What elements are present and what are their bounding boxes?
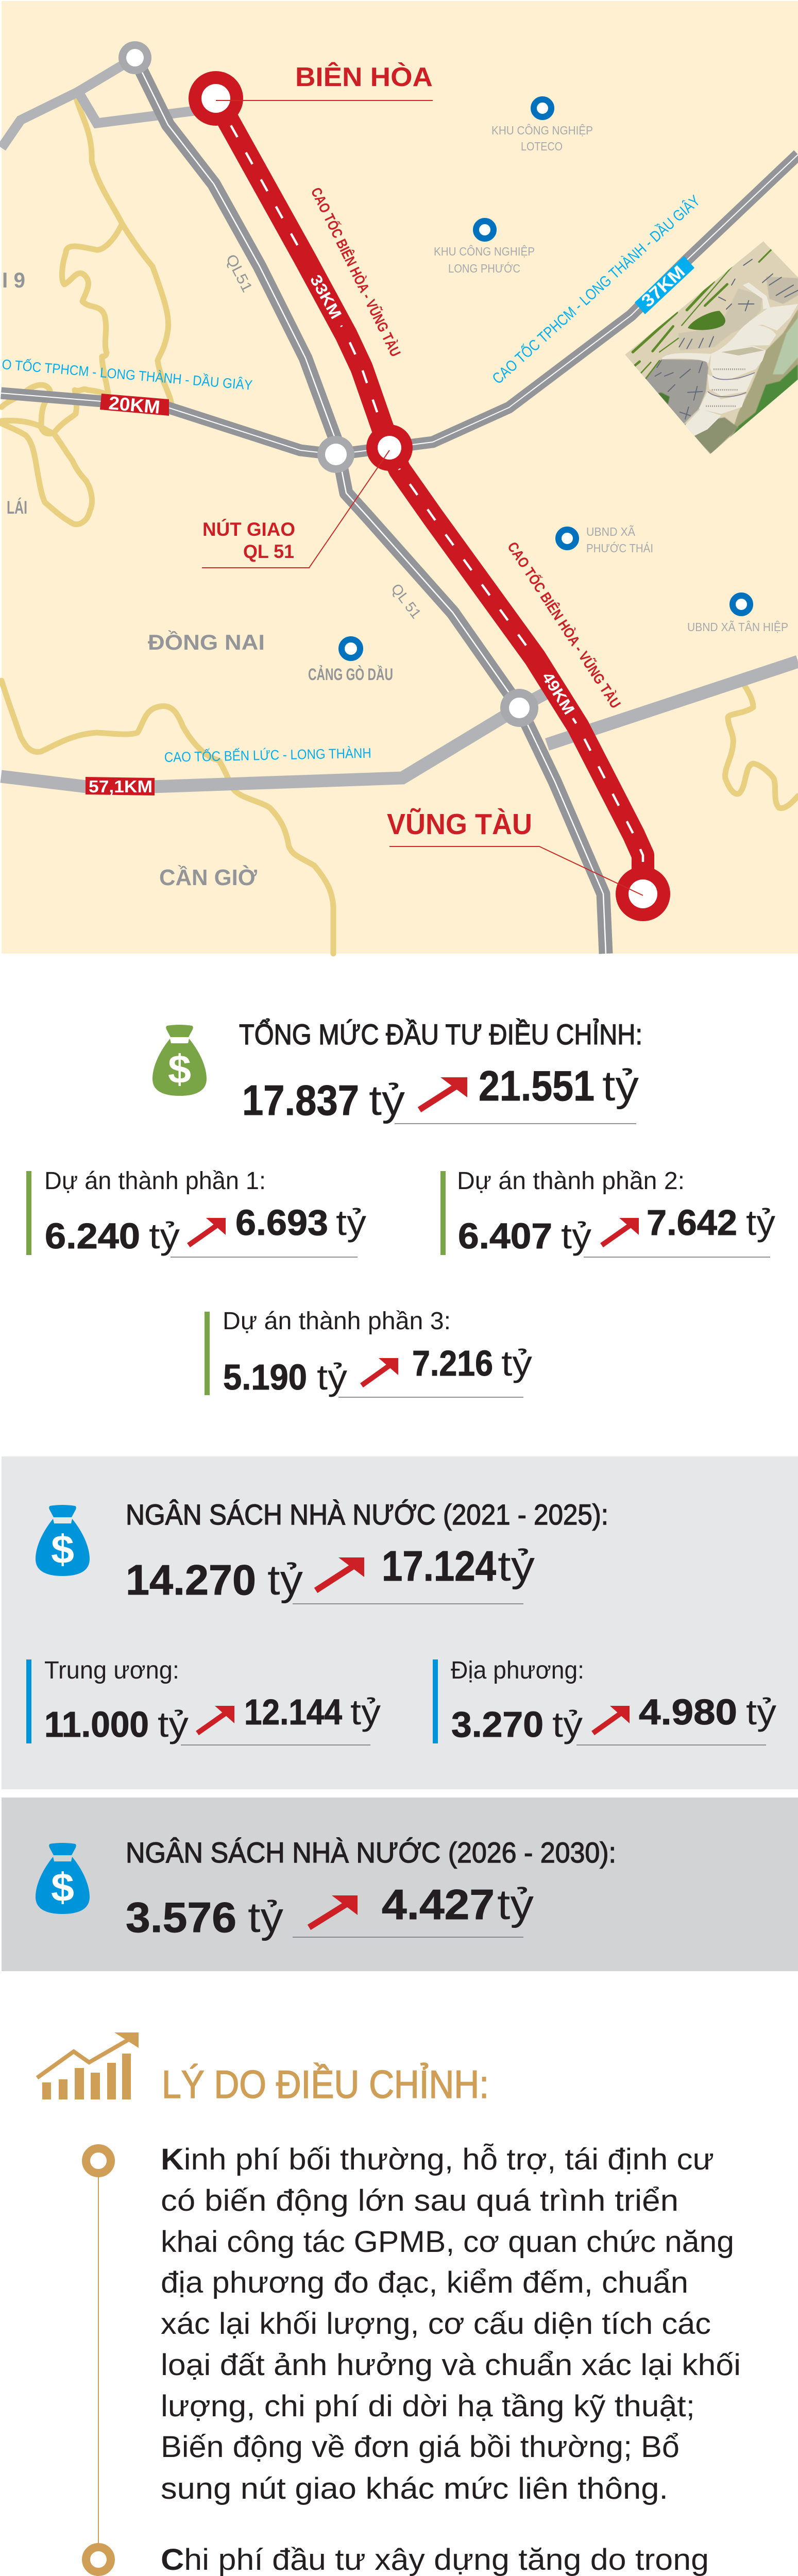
labels: place names: LÁI bbox=[7, 497, 27, 518]
reason 1 text: xác lại khối lượng, cơ cấu diện tích các bbox=[161, 2307, 711, 2341]
panel: component project 1: tỷ bbox=[149, 1216, 180, 1256]
panel: component project 2: 6.407 bbox=[458, 1216, 552, 1256]
icon: growth chart bbox=[37, 2032, 139, 2099]
central budget: Trung ương: bbox=[44, 1657, 179, 1684]
arrow bbox=[419, 1077, 467, 1110]
heading: NGÂN SÁCH NHÀ NƯỚC (2021 - 2025): bbox=[126, 1498, 608, 1531]
panel: component project 3: tỷ bbox=[501, 1343, 532, 1383]
panel: component project 2 bbox=[440, 1167, 775, 1257]
panel: component project 2: Dự án thành phần 2: bbox=[457, 1167, 685, 1195]
value change: 17.124 bbox=[382, 1542, 496, 1590]
value change: 3.576 bbox=[126, 1893, 236, 1941]
labels: expressway names bbox=[1, 185, 704, 765]
reason 1 text: loại đất ảnh hưởng và chuẩn xác lại khối bbox=[161, 2348, 741, 2382]
labels: QL51: QL51 bbox=[223, 252, 256, 295]
road: TPHCM - Long Thành - Dầu Giây expressway bbox=[1, 155, 798, 454]
place markers bbox=[342, 99, 750, 658]
icon: green money bag bbox=[152, 1025, 207, 1096]
labels: place names: UBND XÃ TÂN HIỆP bbox=[687, 620, 788, 634]
labels: expressway names: CAO TỐC TPHCM - LONG THÀNH - DẦU GIÂY bbox=[489, 192, 704, 387]
panel: component project 1 bbox=[26, 1167, 366, 1257]
value change: 4.427 bbox=[382, 1880, 495, 1928]
labels: QL51 bbox=[223, 252, 425, 621]
labels: expressway names: CAO TỐC BẾN LỨC - LONG THÀNH bbox=[164, 744, 371, 765]
central budget: tỷ bbox=[158, 1704, 189, 1744]
label: 57,1KM: 57,1KM bbox=[89, 777, 152, 796]
labels: QL51: QL 51 bbox=[388, 581, 425, 621]
road: Biên Hòa - Vũng Tàu expressway bbox=[216, 98, 643, 894]
labels: place names: I 9 bbox=[2, 268, 25, 292]
central budget: 11.000 bbox=[44, 1704, 149, 1744]
reason 1 text: khai công tác GPMB, cơ quan chức năng bbox=[161, 2225, 734, 2259]
panel: component project 2: tỷ bbox=[561, 1216, 591, 1256]
reason 1 text: Biến động về đơn giá bồi thường; Bổ bbox=[161, 2430, 680, 2464]
panel: component project 1: Dự án thành phần 1: bbox=[44, 1167, 266, 1195]
heading: TỔNG MỨC ĐẦU TƯ ĐIỀU CHỈNH: bbox=[239, 1018, 642, 1050]
labels: place names: UBND XÃ bbox=[586, 525, 636, 538]
panel: component project 1: 6.240 bbox=[45, 1216, 140, 1256]
labels: place names: CẦN GIỜ bbox=[159, 865, 257, 890]
leader lines bbox=[202, 100, 643, 895]
section: reasons for adjustment bbox=[37, 2032, 741, 2576]
boundary lines bbox=[2, 98, 798, 954]
value change: tỷ bbox=[602, 1062, 639, 1110]
heading: LÝ DO ĐIỀU CHỈNH: bbox=[162, 2063, 489, 2107]
icon: blue money bag: $ bbox=[51, 1527, 74, 1572]
central budget bbox=[26, 1657, 381, 1745]
local budget: 4.980 bbox=[639, 1692, 737, 1732]
local budget: tỷ bbox=[552, 1704, 583, 1744]
value change: tỷ bbox=[498, 1542, 535, 1590]
central budget: 12.144 bbox=[244, 1692, 342, 1732]
reason 1 text: địa phương đo đạc, kiểm đếm, chuẩn bbox=[161, 2266, 688, 2299]
city label: Vũng Tàu: VŨNG TÀU bbox=[387, 808, 532, 841]
reason 1 text: có biến động lớn sau quá trình triển bbox=[161, 2184, 678, 2217]
labels: place names: CẢNG GÒ DẦU bbox=[308, 665, 393, 684]
panel: component project 3: 7.216 bbox=[412, 1343, 493, 1383]
road: upper left branches bbox=[2, 58, 195, 148]
labels: place names: KHU CÔNG NGHIỆP bbox=[491, 123, 593, 137]
icon: blue money bag bbox=[36, 1843, 90, 1914]
junction label bbox=[202, 518, 295, 562]
reason 1 text: sung nút giao khác mức liên thông. bbox=[161, 2472, 668, 2505]
value change: 14.270 bbox=[126, 1556, 256, 1604]
labels: expressway names: CAO TỐC BIÊN HÒA - VŨNG TÀU bbox=[504, 539, 624, 711]
timeline bbox=[86, 2148, 111, 2576]
panel: state budget 2021-2025 bbox=[2, 1456, 798, 1789]
city label: Biên Hòa: BIÊN HÒA bbox=[295, 62, 433, 92]
local budget: 3.270 bbox=[451, 1704, 544, 1744]
value change: tỷ bbox=[369, 1076, 405, 1124]
labels: place names: LOTECO bbox=[521, 140, 563, 153]
value change bbox=[126, 1542, 535, 1604]
icon: blue money bag bbox=[36, 1505, 90, 1576]
labels: place names: LONG PHƯỚC bbox=[448, 262, 520, 275]
panel: component project 1: 6.693 bbox=[235, 1202, 328, 1243]
heading: NGÂN SÁCH NHÀ NƯỚC (2026 - 2030): bbox=[126, 1836, 616, 1869]
panel: total investment bbox=[152, 1018, 642, 1124]
road: QL51 bbox=[135, 58, 606, 954]
value change: tỷ bbox=[267, 1556, 303, 1604]
panel: component project 3: 5.190 bbox=[223, 1357, 307, 1397]
label: 20KM: 20KM bbox=[108, 392, 161, 418]
value change bbox=[126, 1880, 534, 1941]
value change: tỷ bbox=[497, 1880, 534, 1928]
central budget: tỷ bbox=[350, 1692, 381, 1732]
panel: component project 2: 7.642 bbox=[647, 1202, 737, 1243]
labels: place names: PHƯỚC THÁI bbox=[586, 541, 653, 555]
local budget bbox=[433, 1657, 776, 1745]
interchange nodes bbox=[118, 41, 670, 921]
reason 1 text: lượng, chi phí di dời hạ tầng kỹ thuật; bbox=[161, 2389, 695, 2423]
panel: route map bbox=[1, 1, 798, 954]
value change: tỷ bbox=[248, 1893, 284, 1941]
junction label: QL 51 bbox=[243, 541, 294, 562]
icon: blue money bag: $ bbox=[51, 1865, 74, 1910]
reason 2 text: Chi phí đầu tư xây dựng tăng do trong bbox=[161, 2543, 709, 2576]
labels: place names: ĐỒNG NAI bbox=[148, 630, 265, 654]
label: 33KM: 33KM bbox=[307, 272, 345, 322]
panel: state budget 2026-2030 bbox=[2, 1798, 798, 1971]
value change: 21.551 bbox=[479, 1062, 595, 1110]
label: 37KM bbox=[635, 256, 694, 314]
reason 1 text: Kinh phí bối thường, hỗ trợ, tái định cư bbox=[161, 2143, 714, 2176]
local budget: Địa phương: bbox=[451, 1657, 584, 1684]
panel: component project 2: tỷ bbox=[746, 1202, 775, 1243]
junction label: NÚT GIAO bbox=[202, 518, 295, 540]
label: 49KM: 49KM bbox=[538, 669, 578, 718]
labels: expressway names: O TỐC TPHCM - LONG THÀNH - DẦU GIÂY bbox=[1, 355, 253, 393]
reason 1 text bbox=[161, 2143, 741, 2505]
panel: component project 3: Dự án thành phần 3: bbox=[223, 1308, 451, 1335]
value change: 17.837 bbox=[242, 1076, 359, 1124]
labels: place names: KHU CÔNG NGHIỆP bbox=[434, 244, 535, 258]
road: Bến Lức - Long Thành expressway bbox=[1, 662, 798, 787]
labels: expressway names: CAO TỐC BIÊN HÒA - VŨNG TÀU bbox=[308, 185, 404, 359]
panel: component project 3 bbox=[205, 1308, 532, 1397]
labels: place names bbox=[2, 123, 788, 890]
panel: component project 1: tỷ bbox=[336, 1202, 366, 1243]
icon: green money bag: $ bbox=[168, 1046, 191, 1092]
label: 37KM: 37KM bbox=[638, 262, 689, 311]
local budget: tỷ bbox=[746, 1692, 776, 1732]
panel: component project 3: tỷ bbox=[317, 1357, 347, 1397]
value change bbox=[242, 1062, 639, 1124]
image: Long Thành airport bbox=[618, 237, 798, 459]
